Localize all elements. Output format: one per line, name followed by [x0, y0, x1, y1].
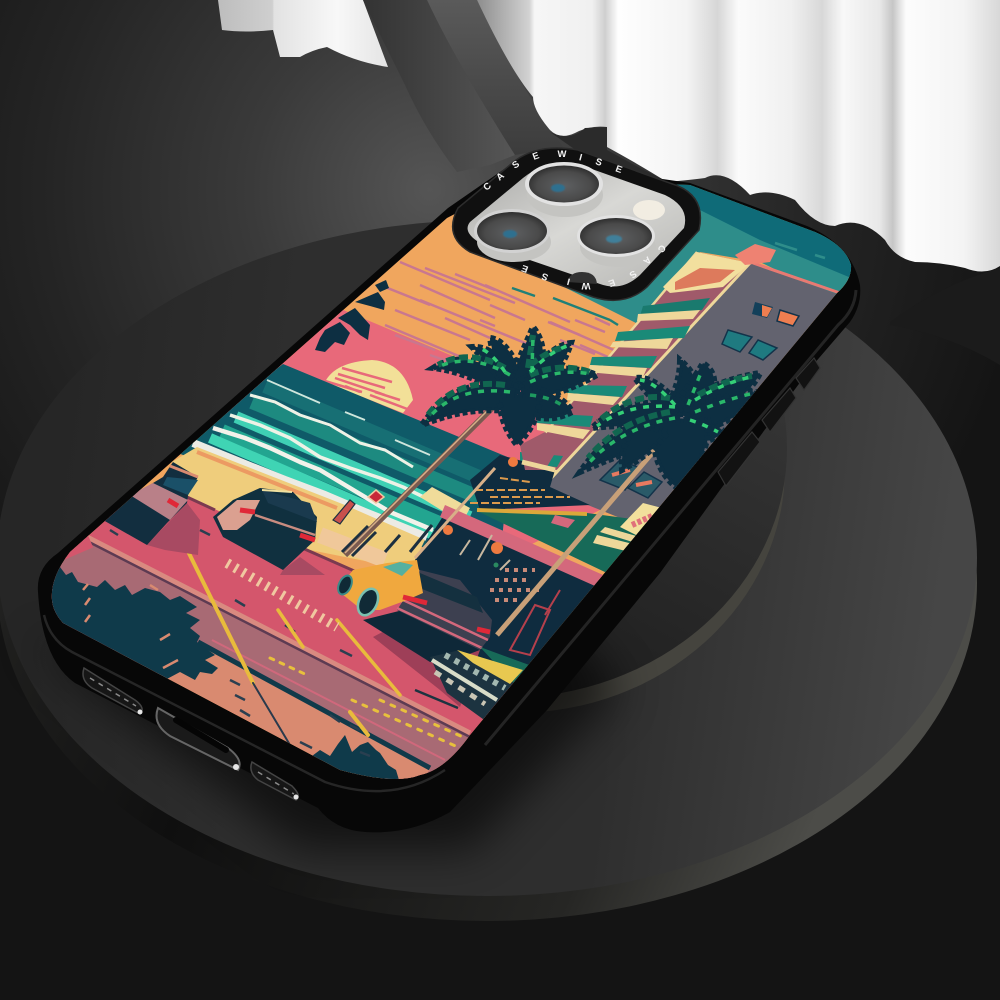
pavement kerb	[198, 642, 430, 768]
brand text top: CASEWISE	[481, 149, 624, 193]
road sign left	[333, 500, 355, 524]
shop interior	[415, 518, 599, 675]
large round platform top	[0, 220, 977, 896]
front yellow car	[430, 647, 532, 722]
curtain: top left	[218, 0, 388, 67]
curtain: top right	[477, 0, 1000, 272]
phone rim highlight	[44, 615, 445, 791]
curtain shadow blobs	[550, 127, 700, 190]
mauve lower road	[40, 537, 470, 790]
upper disc top	[562, 420, 785, 693]
brand text bottom: CASEWISE	[520, 242, 668, 291]
bush bottom left	[52, 567, 218, 680]
light teal sky	[564, 184, 852, 323]
dark wedge stand at right	[890, 268, 1000, 365]
curved stand band 2	[427, 0, 563, 155]
pavement specks	[110, 530, 370, 756]
kerb lines	[55, 537, 470, 737]
sea	[170, 364, 510, 560]
shop details	[443, 457, 560, 655]
palm crown 1	[422, 327, 597, 445]
shop green awning	[475, 510, 650, 573]
road shadow near front car	[415, 690, 458, 708]
palm trunk 1	[345, 395, 505, 555]
roof box	[735, 244, 776, 265]
teal sky streaks	[512, 288, 618, 325]
flash	[633, 200, 665, 220]
taxi	[335, 560, 492, 662]
lens right	[577, 215, 656, 267]
peach pavement	[112, 649, 430, 779]
palm trunk 2	[497, 438, 665, 635]
sun	[325, 360, 413, 413]
road	[52, 499, 514, 779]
middle car shadow	[280, 557, 325, 575]
shop sign	[620, 503, 662, 537]
palm fronds top left	[315, 280, 389, 352]
palm crown 2	[580, 360, 760, 490]
hotel sign	[663, 252, 750, 293]
rooftop cluster	[470, 432, 590, 510]
side buttons	[718, 358, 820, 486]
building windows	[600, 302, 799, 498]
phone artwork	[52, 184, 852, 779]
phone shadow	[30, 620, 620, 850]
sun stripes	[325, 368, 410, 410]
large round platform side	[0, 245, 977, 921]
taxi shadow	[373, 620, 480, 707]
camera ring	[453, 148, 700, 300]
taxi rear body	[397, 570, 492, 650]
yellow road lines	[186, 553, 462, 747]
dark teal sky	[676, 184, 852, 277]
phone	[20, 120, 880, 832]
balcony column	[520, 251, 751, 480]
bush bottom right	[312, 735, 399, 779]
kerb top	[188, 496, 355, 572]
beach	[172, 447, 425, 570]
sensor	[567, 272, 597, 284]
pink sky	[226, 310, 699, 544]
lens top	[525, 162, 603, 217]
upper disc side	[546, 486, 784, 711]
hotel sign lettering block	[675, 268, 735, 290]
bush specks	[83, 584, 178, 668]
cream strips	[593, 527, 640, 552]
small palm trunk	[415, 468, 495, 558]
yellow awning bar	[477, 510, 587, 514]
building roof edge	[753, 263, 840, 293]
car middle	[213, 488, 317, 570]
taxi rear shadow	[363, 610, 480, 662]
lens left	[474, 209, 551, 262]
left car shadow	[147, 503, 200, 555]
building grey facade	[543, 263, 840, 530]
cream cornice left	[420, 487, 470, 523]
small red sign	[551, 515, 575, 528]
curved stand band 1	[363, 0, 515, 172]
taxi body	[337, 560, 423, 610]
camera window	[468, 163, 685, 287]
foam lines	[193, 380, 440, 537]
car left	[103, 462, 198, 545]
bottom ports	[83, 668, 298, 800]
orange sky	[52, 184, 852, 779]
phone body	[38, 165, 860, 832]
roadside posts	[342, 525, 432, 556]
sea bands	[210, 386, 500, 540]
shop sign lettering	[632, 516, 652, 525]
balcony floors	[640, 298, 710, 314]
pink shop strip	[440, 505, 610, 590]
sky streaks	[380, 262, 625, 365]
road sign red diamond	[368, 490, 384, 503]
right rim highlight	[485, 290, 856, 745]
